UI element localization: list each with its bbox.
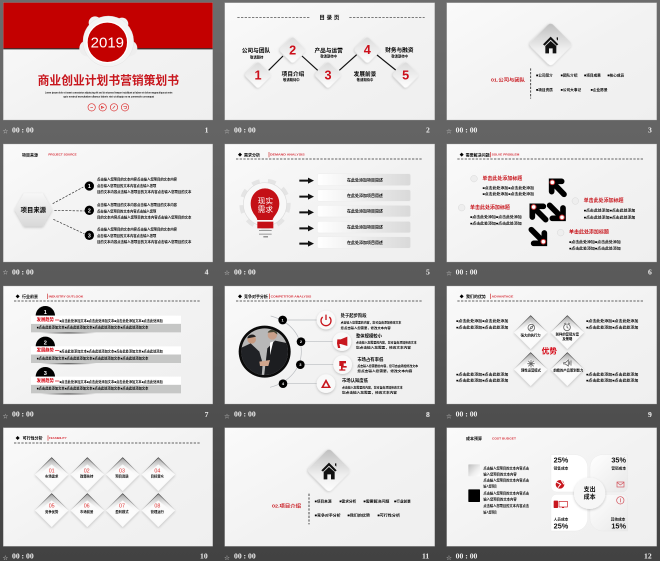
legend text: 输入您项目	[483, 484, 497, 489]
footer	[224, 410, 430, 420]
footer	[224, 551, 429, 561]
item titles: 单击此处添加标题	[569, 229, 609, 236]
icon: power	[321, 315, 331, 326]
hexagon: 项目来源	[21, 205, 47, 214]
bullet text	[456, 318, 639, 383]
bullet text: ■点击此处添加■点击此处添加	[456, 378, 509, 383]
header: 竞争对手分析	[244, 293, 268, 299]
row 2: ■点击此处添加文本■点击此处添加文本■点击此处添加文本■点击此处添加	[59, 349, 163, 354]
icons	[527, 323, 571, 367]
item titles: 单击此处添加标题	[584, 197, 624, 204]
diamond numbers: 05	[49, 504, 55, 510]
row 1	[31, 306, 181, 334]
chart labels: 25%	[554, 522, 569, 531]
icon: megaphone	[337, 337, 347, 348]
chart labels: 销售成本	[554, 466, 569, 471]
item labels: 敬请期待	[250, 54, 264, 59]
panel: slide 2 contents	[224, 3, 435, 135]
legend text: 输入您项目的文本内容	[483, 497, 517, 502]
photo: handshake	[239, 326, 291, 378]
panel: slide 9 our advantages	[446, 286, 657, 420]
item labels	[242, 46, 414, 82]
icons: four circles	[88, 104, 129, 111]
footer	[2, 410, 209, 420]
numbered diamonds: 3	[324, 68, 332, 82]
bullet text: ■点击此处添加■点击此处添加	[456, 325, 509, 330]
footer	[446, 551, 652, 561]
icon: warning triangle	[321, 379, 331, 388]
footer: 1	[205, 126, 209, 135]
chart labels: 25%	[554, 455, 569, 464]
diamond numbers: 07	[119, 504, 125, 510]
row 3: ■点击此处添加文本■点击此处添加文本■点击此处添加文本■点击此处添加文本	[37, 386, 149, 391]
bullet list: ■我们的优势	[347, 513, 370, 518]
diamond numbers: 04	[154, 468, 160, 474]
footer: 00 : 00	[234, 410, 256, 419]
item labels: 项目介绍	[282, 70, 305, 78]
header: ADVANTAGE	[492, 294, 513, 298]
text block: 目的文本内容点击输入您项目的文本内容点击输入您项目的文本	[97, 239, 192, 244]
dashed connectors	[53, 187, 85, 234]
numbered diamonds: 1	[254, 68, 262, 82]
legend text: 点击输入您项目的文本内容点击	[483, 477, 530, 482]
footer: 00 : 00	[456, 267, 478, 276]
diamond numbers: 02	[84, 468, 90, 474]
text block: 点击输入您项目的文本内容点击输入您项目的文本内容	[97, 177, 178, 182]
panel: slide 12 cost budget	[446, 428, 657, 561]
diamond labels: 竞争优势	[45, 509, 59, 514]
header: 行业前景	[22, 293, 38, 299]
item labels: 敬请期待中	[357, 77, 374, 82]
list boxes: 在此处添加项目简述	[347, 239, 383, 245]
panel: slide 6 solve problem	[446, 144, 657, 278]
bullet text: ■点击此处添加■点击此处添加	[586, 371, 639, 376]
footer	[446, 125, 652, 135]
footer: 6	[648, 268, 652, 277]
item text: 处于起步阶段	[341, 312, 367, 319]
footer: 00 : 00	[12, 551, 34, 560]
number badges	[85, 181, 94, 240]
footer: ☆	[224, 412, 230, 420]
item text: 您点击输入您需要，修改文本内容	[341, 325, 391, 330]
bullet list	[536, 73, 625, 92]
item labels: 发展前景	[354, 70, 377, 78]
chart labels: 人员成本	[554, 517, 569, 522]
header: INDUSTRY OUTLOOK	[49, 294, 84, 298]
item labels: 敬请期待中	[391, 54, 409, 59]
bullet list: ■行业前景	[394, 498, 411, 503]
panel: slide 3 section one	[446, 3, 657, 135]
footer: 00 : 00	[12, 125, 34, 134]
bullet list: ■竞争对手分析	[315, 513, 341, 518]
header	[466, 435, 516, 441]
diamond labels: 盈利模式	[115, 509, 129, 514]
diamond labels	[521, 331, 584, 373]
item text: 点击输入您需要的内容，您可自由添加修改文本	[342, 384, 403, 389]
item text: ■点击此处添加■点击此处添加	[569, 239, 621, 244]
item titles: 单击此处添加标题	[470, 204, 510, 211]
item text: ■点击此处添加■点击此处添加	[470, 214, 522, 219]
item text: 您点击输入您需要，修改文本内容	[357, 368, 412, 373]
item titles	[470, 175, 624, 236]
text block: 点击输入您项目的文本内容点击输入您项	[97, 208, 157, 213]
panel: slide 1 cover	[2, 3, 213, 135]
arrow dots	[531, 180, 564, 244]
diamond labels: 别样的营销方案	[556, 331, 580, 336]
list boxes: 在此处添加项目简述	[347, 224, 383, 230]
footer	[224, 267, 430, 277]
item labels: 敬请期待中	[320, 54, 338, 59]
footer: ☆	[2, 269, 8, 277]
chevron icons	[458, 175, 579, 236]
section label: 01.公司与团队	[491, 77, 525, 84]
number badges: 1	[88, 184, 91, 190]
bullet list: ■核心成员	[607, 73, 625, 78]
diamond numbers: 01	[49, 468, 55, 474]
item text: ■点击此处添加■点击此处添加	[482, 191, 535, 196]
header	[457, 293, 644, 301]
text block: 点击输入您项目的文本内容点击输入您项	[97, 233, 157, 238]
bullet text: ■点击此处添加■点击此处添加	[586, 325, 639, 330]
footer: 10	[200, 552, 208, 561]
item text: ■点击此处添加■点击此处添加	[569, 246, 621, 251]
badge: 2019	[79, 16, 137, 67]
divider	[529, 68, 532, 99]
footer	[2, 551, 208, 561]
chart labels	[554, 455, 626, 531]
red banner	[3, 3, 213, 48]
footer: 11	[422, 552, 429, 561]
list boxes: 在此处添加项目简述	[347, 176, 383, 182]
legend text	[483, 465, 530, 514]
item text: 整体规模较小	[356, 333, 383, 340]
diamond labels: 目标受众	[151, 474, 165, 479]
icon: light bulb with gear: 现实	[258, 195, 273, 205]
row 1: 发展趋势	[37, 316, 55, 323]
item text	[341, 312, 418, 395]
footer: ☆	[446, 270, 452, 278]
numbered diamonds: 2	[289, 44, 296, 58]
text block: 目的文本内容点击输入您项目的文本内容点击输入您项目的文本	[97, 189, 192, 194]
diamond with house icon	[307, 448, 351, 492]
item labels: 产品与运营	[315, 47, 343, 55]
item labels: 敬请期待中	[283, 77, 300, 82]
header: 项目来源	[22, 151, 38, 157]
item text: 点击输入您需要的内容，您可自由添加修改文本	[356, 340, 417, 345]
diamond labels: 政策扶持	[80, 474, 94, 479]
panel: slide 11 section two	[224, 428, 435, 561]
header	[22, 151, 77, 157]
diamond labels: 理性运营模式	[521, 368, 542, 373]
header	[236, 293, 422, 301]
diamond labels: 管理运行	[151, 509, 165, 514]
legend text: 输入您项目的文本内容	[483, 471, 517, 476]
bullet list: ■公司大事记	[561, 87, 581, 92]
advantage diamonds	[514, 316, 584, 386]
footer: 9	[648, 410, 652, 419]
diamond numbers	[49, 468, 160, 510]
bullet text: ■点击此处添加■点击此处添加	[586, 378, 639, 383]
badge: 2019: 2019	[91, 35, 124, 52]
chart labels: 营销成本	[611, 466, 626, 471]
diamond numbers: 06	[84, 504, 90, 510]
footer: 8	[426, 410, 430, 419]
diamond numbers: 08	[154, 504, 160, 510]
connectors	[270, 316, 333, 387]
bullet list: ■团队介绍	[561, 73, 578, 78]
divider	[308, 494, 310, 524]
panel: slide 8 competitor analysis	[224, 286, 435, 420]
diamond labels: 项目资质	[115, 474, 129, 479]
arrow shapes	[531, 181, 564, 243]
bullet list: ■需求分析	[339, 498, 357, 503]
footer	[224, 125, 430, 135]
bullet list	[315, 498, 411, 518]
row 3: ■点击此处添加文本■点击此处添加文本■点击此处添加文本■点击此处添加	[59, 379, 163, 384]
list boxes: 在此处添加项目简述	[347, 208, 383, 214]
numbered points: 2	[300, 339, 303, 344]
diamond numbers: 03	[119, 468, 125, 474]
item text: 市场占有率低	[357, 356, 384, 363]
legend text: 点击输入您项目的文本内容点击	[483, 491, 530, 496]
bullet text: ■点击此处添加■点击此处添加	[586, 318, 639, 323]
diamond labels: 及策略	[562, 336, 573, 341]
header: COMPETITOR ANALYSIS	[271, 294, 311, 298]
arrows	[299, 178, 314, 247]
item text: ■点击此处添加■点击此处添加	[470, 221, 522, 226]
chart labels: 15%	[611, 522, 626, 531]
numbered points	[278, 316, 305, 388]
bullet list: ■企业愿景	[591, 87, 608, 92]
row 3: 3	[44, 371, 47, 377]
item text: 点击输入您需要的内容，您可自由添加修改文本	[341, 320, 401, 325]
header	[14, 293, 200, 301]
footer: 12	[644, 552, 652, 561]
numbered points: 3	[299, 362, 302, 367]
petal chart: 支出	[584, 486, 596, 494]
footer: 3	[648, 126, 652, 135]
diamonds	[35, 458, 175, 527]
footer: 00 : 00	[12, 410, 34, 419]
subtitle text: quis nostrud exercitation ullamco laboris nisi ut aliquip ex ea commodo consequat	[63, 94, 154, 98]
bullet list: ■可行性分析	[377, 513, 400, 518]
footer: 00 : 00	[234, 125, 256, 134]
diamond labels: 市场需求	[45, 474, 59, 479]
footer: 00 : 00	[234, 551, 256, 560]
icon circles	[317, 311, 352, 393]
footer: 7	[205, 410, 209, 419]
row 2: 2	[44, 341, 47, 347]
text block: 目的文本内容点击输入您项目的文本内容点击输入您项目的文本	[97, 215, 192, 220]
diamond with house icon	[529, 22, 573, 66]
footer	[446, 410, 652, 420]
numbered points: 1	[282, 317, 285, 322]
heading: 目 录 页	[319, 14, 340, 22]
diamond labels: 前瞻的产品策划能力	[553, 368, 584, 373]
footer: 4	[205, 268, 209, 277]
chart labels: 35%	[611, 456, 626, 465]
row 2	[31, 337, 181, 365]
subtitle text	[45, 91, 173, 98]
numbered points: 4	[282, 381, 285, 386]
item text	[470, 185, 636, 251]
footer: ☆	[446, 412, 452, 420]
footer: 00 : 00	[12, 267, 34, 276]
chart labels: 其他成本	[611, 517, 626, 522]
icon: light bulb with gear: 需求	[258, 204, 273, 214]
footer: 5	[426, 268, 430, 277]
numbered diamonds: 5	[402, 68, 409, 82]
footer: ☆	[224, 127, 230, 135]
header	[457, 151, 644, 159]
header: FEASIBILITY	[49, 436, 67, 440]
footer: 00 : 00	[456, 125, 478, 134]
header: DEMAND ANALYSIS	[270, 153, 305, 157]
footer: 00 : 00	[456, 551, 478, 560]
list boxes	[317, 174, 411, 248]
numbered diamonds	[244, 36, 419, 89]
footer: 00 : 00	[456, 410, 478, 419]
list boxes: 在此处添加项目简述	[347, 192, 383, 198]
numbered diamonds: 4	[364, 43, 371, 57]
header: SOLVE PROBLEM	[492, 153, 520, 157]
panel: slide 10 feasibility	[2, 428, 213, 561]
item text: ■点击此处添加■点击此处添加	[584, 208, 636, 213]
row 1: ■点击此处添加文本■点击此处添加文本■点击此处添加文本■点击此处添加文本	[37, 325, 149, 330]
hexagon	[15, 193, 52, 226]
centre label: 优势	[542, 346, 557, 356]
text block: 点击输入您项目的文本内容点击输入您项目的文本内容	[97, 202, 178, 207]
legend text: 点击输入您项目的文本内容点击	[483, 465, 530, 470]
row 3	[31, 367, 181, 395]
footer: ☆	[2, 127, 8, 135]
item text: 市场认知度低	[342, 377, 369, 384]
legend text: 输入您项目	[483, 509, 497, 514]
diamond labels	[45, 474, 165, 514]
item labels: 财务与融资	[385, 46, 414, 54]
diamond labels: 市场前景	[80, 509, 94, 514]
header: 需要解决问题	[466, 151, 490, 157]
text block: 点击输入您项目的文本内容点击输入您项目的文本内容	[97, 227, 178, 232]
header	[14, 435, 200, 443]
header: 需求分析	[244, 151, 260, 157]
footer	[2, 125, 209, 135]
item text: ■点击此处添加■点击此处添加	[482, 185, 535, 190]
connector lines	[269, 55, 396, 70]
icon: mail	[617, 482, 624, 487]
header: PROJECT SOURCE	[48, 153, 77, 157]
header: COST BUDGET	[492, 436, 516, 440]
bullet list: ■项目资质	[536, 87, 553, 92]
row 2: ■点击此处添加文本■点击此处添加文本■点击此处添加文本■点击此处添加文本	[37, 355, 149, 360]
panel: slide 5 demand analysis	[224, 144, 435, 277]
title: 商业创业计划书营销策划书	[38, 73, 179, 87]
panel: slide 4 project source	[2, 144, 213, 277]
section label: 02.项目介绍	[272, 502, 301, 509]
header: 我们的优势	[466, 293, 486, 299]
header: 可行性分析	[23, 435, 43, 441]
header	[236, 151, 422, 159]
item text: 点击输入您需要的内容，您可自由添加修改文本	[357, 363, 418, 368]
row 1: ■点击此处添加文本■点击此处添加文本■点击此处添加文本■点击此处添加	[59, 318, 163, 323]
number badges: 2	[88, 208, 91, 214]
icon: stand	[339, 361, 347, 371]
bullet list: ■公司简介	[536, 73, 553, 78]
footer: ☆	[224, 269, 230, 277]
footer: ☆	[2, 412, 8, 420]
diamond labels: 强大的执行力	[521, 332, 541, 337]
bullet list: ■需要解决问题	[363, 498, 390, 503]
item text: ■点击此处添加■点击此处添加	[584, 214, 636, 219]
item labels: 公司与团队	[242, 47, 270, 55]
item text: 您点击输入您需要，修改文本内容	[356, 345, 411, 350]
bullet text: ■点击此处添加■点击此处添加	[456, 318, 509, 323]
panel: slide 7 industry outlook	[2, 286, 213, 420]
icon: info circle	[617, 497, 624, 504]
number badges: 3	[88, 233, 91, 239]
bullet text: ■点击此处添加■点击此处添加	[456, 371, 509, 376]
bullet list: ■项目来源	[315, 498, 332, 503]
text block: 点击输入您项目的文本内容点击输入您项	[97, 183, 157, 188]
row 1: 1	[44, 310, 47, 316]
legend text: 点击输入您项目的文本内容点击	[483, 503, 530, 508]
icon: light bulb with gear	[241, 181, 289, 237]
row 3: 发展趋势	[37, 377, 55, 384]
legend swatches	[468, 464, 480, 502]
icon: globe	[556, 480, 564, 489]
petal chart	[551, 455, 628, 531]
footer: ☆	[446, 127, 452, 135]
footer: 00 : 00	[234, 267, 256, 276]
footer	[2, 267, 209, 277]
footer: 2	[426, 126, 430, 135]
bullet list: ■项目成果	[584, 73, 601, 78]
row 2: 发展趋势	[37, 347, 55, 354]
header: 成本预算	[466, 435, 482, 441]
footer	[446, 267, 652, 278]
item text: 您点击输入您需要，修改文本内容	[342, 390, 397, 395]
text block	[97, 177, 192, 244]
icon: monitor	[554, 501, 567, 508]
petal chart: 成本	[584, 493, 596, 501]
subtitle text: Lorem ipsum dolor sit amet consectetur adipiscing elit sed do eiusmod tempor incididunt ut labore et dolore magna aliqua ut enim	[45, 91, 173, 95]
item titles: 单击此处添加标题	[482, 175, 522, 182]
